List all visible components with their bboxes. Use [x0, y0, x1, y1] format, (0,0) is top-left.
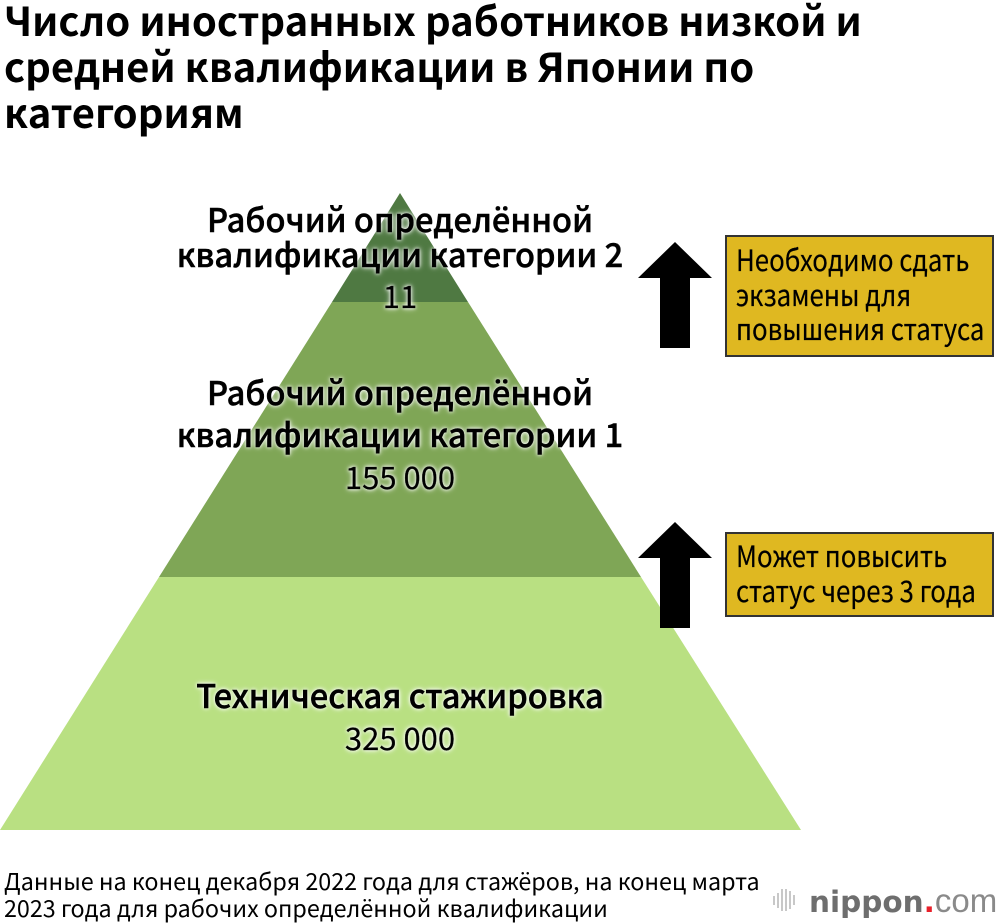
- callout: exams required: экзамены для: [736, 272, 911, 314]
- source note: [4, 863, 760, 924]
- callout: status after 3 years: [725, 532, 994, 617]
- logo: nippon.com: [773, 882, 997, 919]
- label: technical internship: [194, 671, 606, 759]
- tier: skilled worker category 2: [332, 193, 468, 302]
- label: category 2: квалификации категории 2: [177, 230, 623, 277]
- tier: skilled worker category 1: [159, 302, 641, 577]
- source note: 2023 года для рабочих определённой квалификации: [4, 890, 608, 924]
- callout: status after 3 years: Может повысить: [736, 534, 947, 576]
- callout: status after 3 years: статус через 3 года: [736, 568, 976, 610]
- tier: technical internship: [0, 577, 801, 830]
- logo icon: [773, 889, 795, 911]
- callout: exams required: Необходимо сдать: [736, 238, 969, 280]
- arrow: lower: [638, 522, 712, 628]
- label: category 2: 11: [383, 272, 417, 317]
- label: category 1: 155 000: [345, 453, 455, 498]
- label: category 1: Рабочий определённой: [207, 368, 593, 415]
- label: category 1: квалификации категории 1: [177, 410, 623, 457]
- title: средней квалификации в Японии по: [4, 36, 754, 94]
- source note: Данные на конец декабря 2022 года для стажёров, на конец марта: [4, 863, 760, 897]
- arrow: upper: [638, 242, 712, 348]
- label: technical internship: 325 000: [345, 714, 455, 759]
- logo text: nippon.com: [809, 882, 997, 919]
- title: [4, 0, 862, 140]
- label: technical internship: Техническая стажировка: [196, 671, 604, 718]
- callout: exams required: повышения статуса: [736, 307, 984, 349]
- label: category 1: [177, 368, 623, 498]
- callout: exams required: [725, 235, 994, 357]
- label: category 2: [177, 195, 623, 317]
- title: категориям: [4, 82, 244, 140]
- label: category 2: Рабочий определённой: [207, 195, 593, 242]
